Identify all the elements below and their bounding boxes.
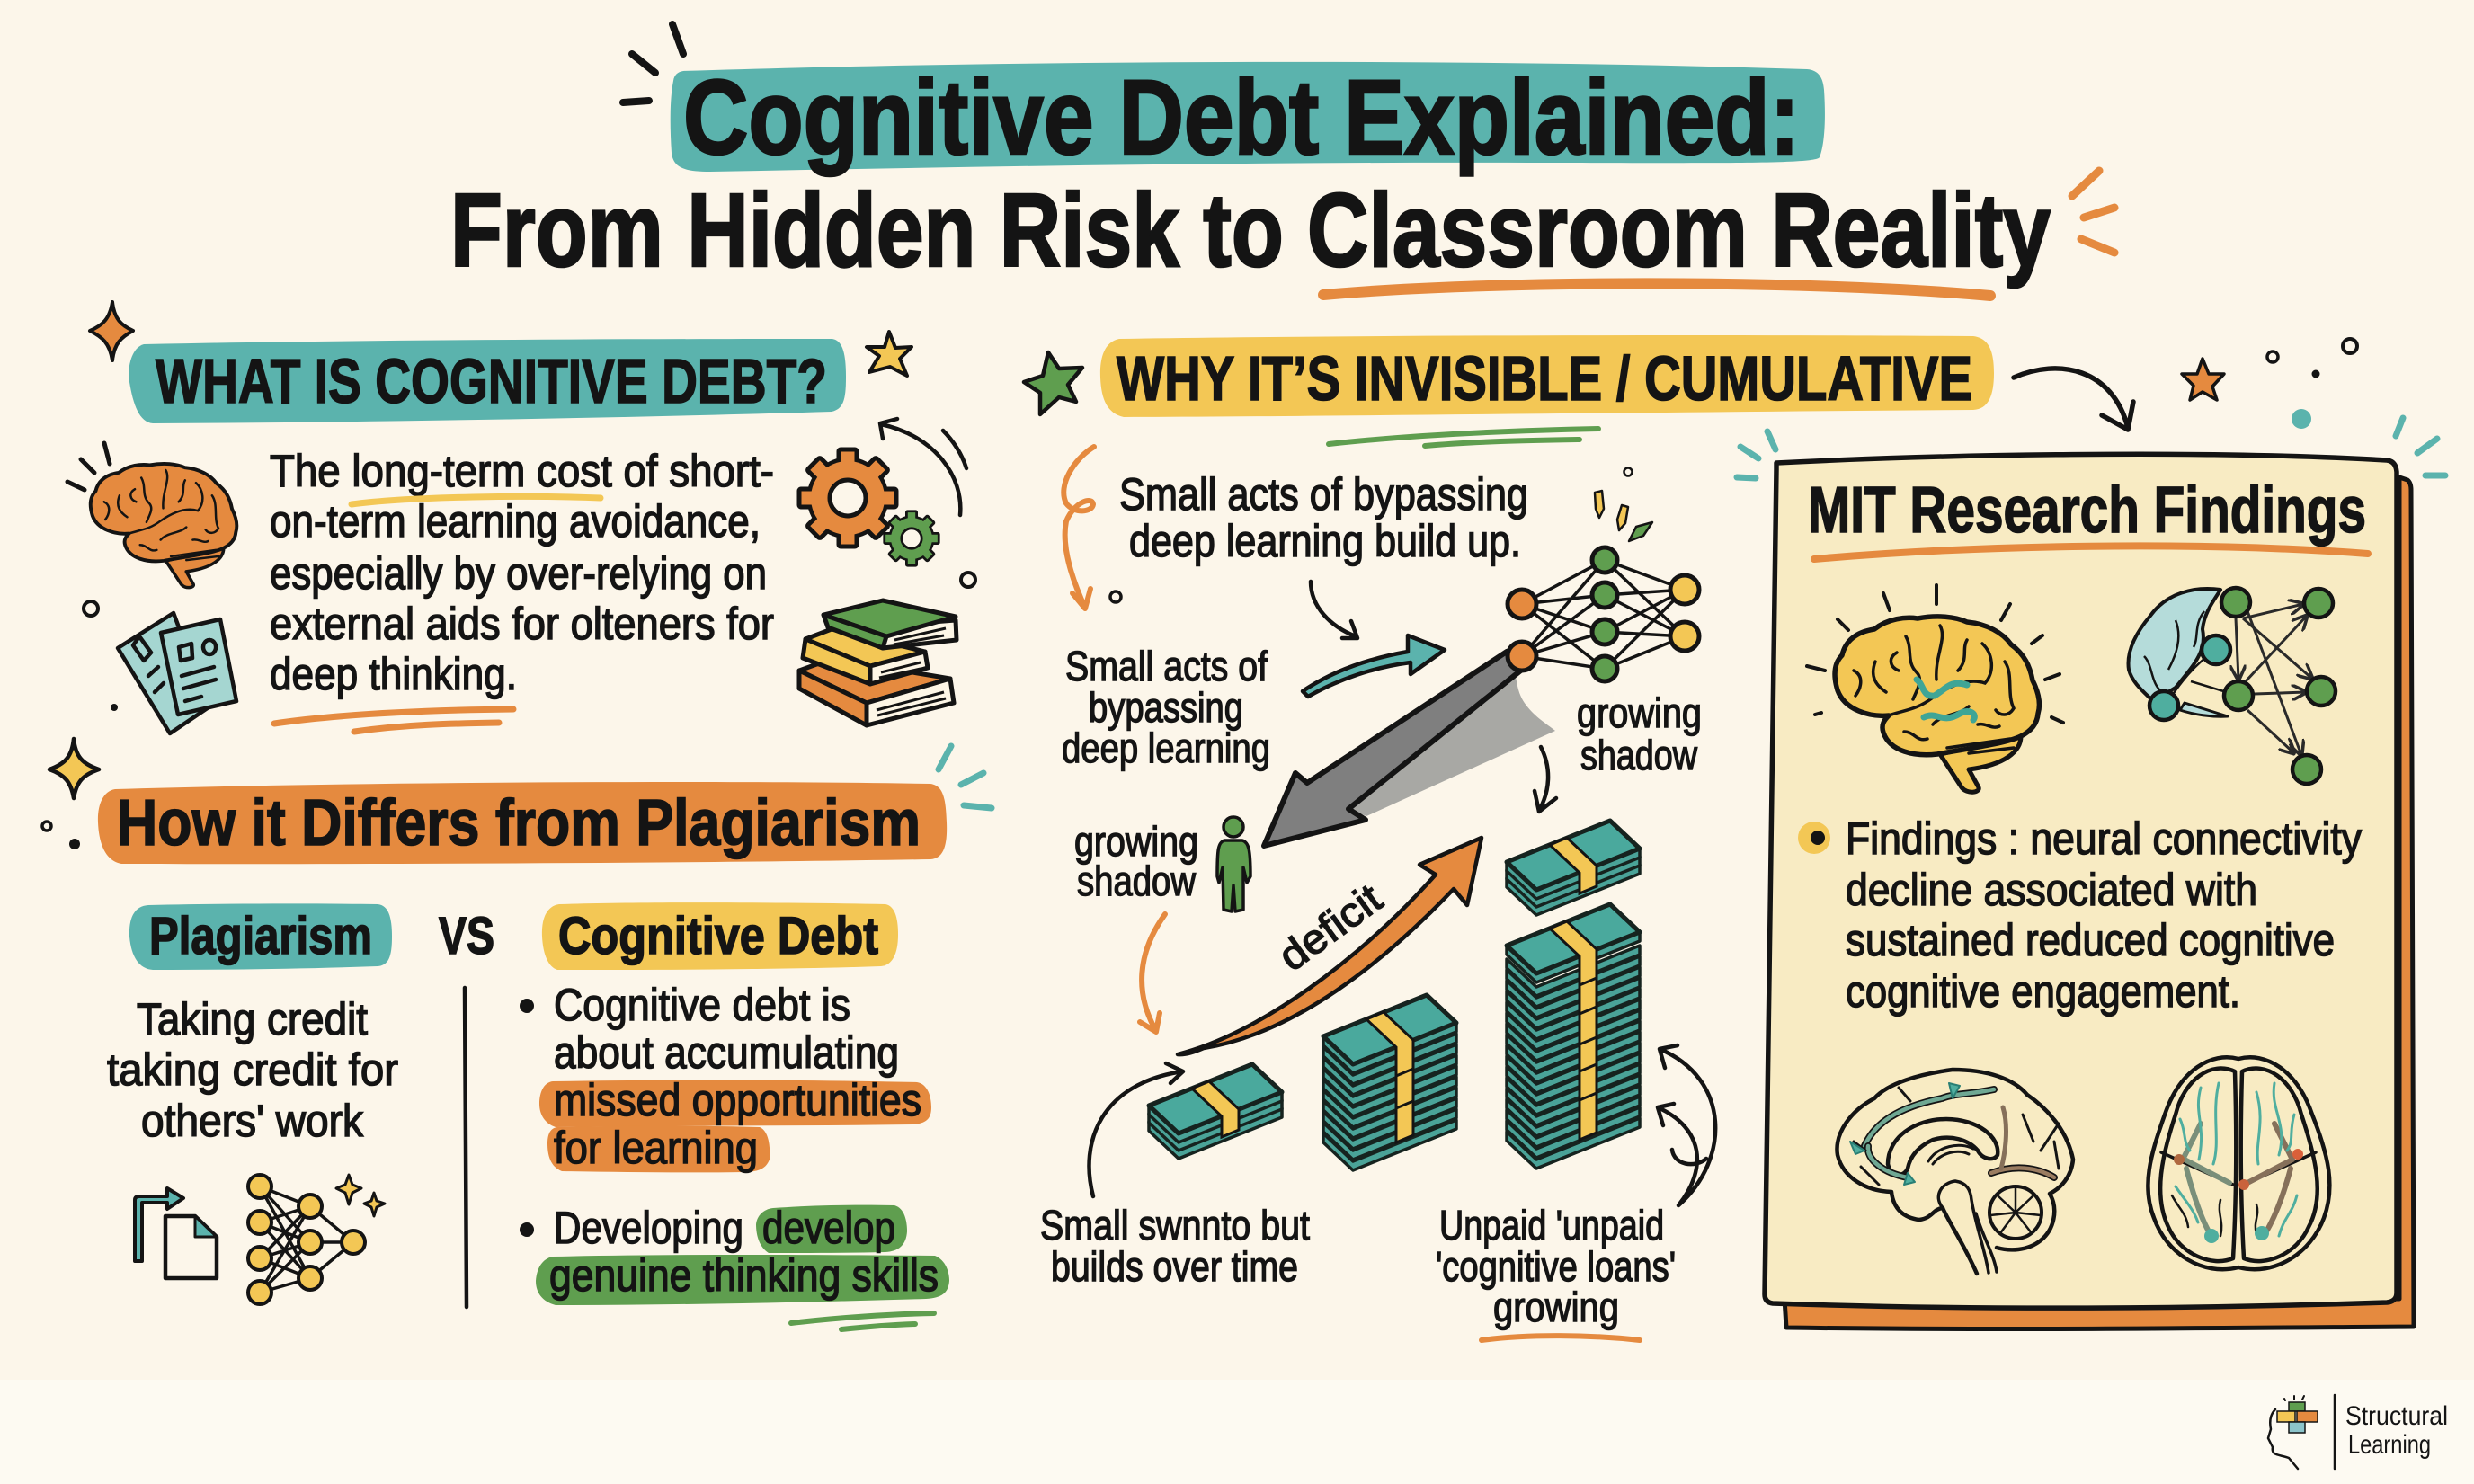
body text: especially by over-relying on (270, 548, 767, 599)
green underlines (1329, 429, 1598, 446)
panel: MIT research findings (1765, 454, 2414, 1329)
decorative circle (1110, 591, 1121, 602)
brain rays (67, 443, 110, 490)
text: small builds: Small swnnto but (1040, 1202, 1310, 1249)
cognitive debt bullets (520, 980, 949, 1305)
text: unpaid loans: Unpaid 'unpaid (1439, 1202, 1664, 1249)
icon: orange sparkle (90, 302, 133, 360)
text: unpaid loans (1436, 1202, 1676, 1330)
text: small builds: builds over time (1051, 1243, 1298, 1290)
cognitive debt bullets: develop (762, 1203, 895, 1253)
logo: structural learning (2268, 1395, 2448, 1469)
icon: orange brain (91, 464, 236, 588)
arrows: unpaid loop (1658, 1045, 1715, 1205)
text: growing shadow right: growing (1577, 689, 1702, 736)
title underline (1323, 283, 1990, 296)
text: growing shadow left (1074, 818, 1198, 904)
icon: neural network (1508, 547, 1699, 681)
plagiarism description: taking credit for (107, 1044, 398, 1095)
footer band (0, 1380, 2474, 1484)
cognitive debt bullets: Developing (554, 1203, 743, 1253)
findings text: decline associated with (1846, 865, 2257, 915)
brain rays (1807, 585, 2063, 723)
yellow underline (352, 496, 601, 504)
heading pill (1100, 335, 1994, 417)
arrow: deficit rising (1178, 838, 1482, 1054)
orange underlines (274, 709, 513, 732)
panel backing (1784, 477, 2414, 1329)
text: growing shadow left: growing (1074, 818, 1198, 865)
logo wordmark (2345, 1401, 2448, 1460)
text: small acts (1119, 469, 1528, 566)
icon: sparkles (336, 1175, 385, 1216)
icon: top-view brain (2148, 1057, 2329, 1269)
cognitive debt pill: Cognitive Debt (558, 907, 878, 965)
body text: external aids for olteners for (270, 599, 774, 649)
icon: yellow brain (1835, 617, 2039, 792)
panel: what is cognitive debt (67, 302, 975, 733)
money stack small (1149, 1064, 1282, 1159)
arrow: black curved (1311, 582, 1357, 638)
arrow: builds (1089, 1063, 1183, 1196)
title line two: From Hidden Risk to Classroom Reality (450, 172, 2051, 289)
body text: The long-term cost of short- (270, 446, 774, 496)
cognitive debt bullets: genuine thinking skills (549, 1250, 939, 1301)
icon: yellow star (867, 332, 912, 376)
findings text (1846, 813, 2362, 1017)
money stack medium (1323, 995, 1456, 1170)
logo wordmark: Structural (2345, 1401, 2448, 1431)
green underlines (791, 1313, 934, 1329)
arrow: orange curly (1063, 447, 1094, 609)
icon: documents (118, 613, 236, 733)
text: growing shadow left: shadow (1077, 858, 1197, 904)
decorative dots (84, 573, 975, 711)
text: small builds (1040, 1202, 1310, 1290)
plagiarism description: others' work (141, 1096, 364, 1146)
title (450, 24, 2114, 296)
icon: person (1217, 817, 1250, 911)
text: small acts: Small acts of bypassing (1119, 469, 1528, 520)
icon: yellow neural network (248, 1175, 365, 1304)
teal ticks (939, 746, 992, 808)
text: small acts of bypassing: Small acts of (1065, 643, 1268, 689)
heading: WHY IT’S INVISIBLE / CUMULATIVE (1117, 343, 1972, 413)
teal ticks (1737, 418, 2445, 478)
vertical divider (465, 988, 467, 1307)
arrow: to MIT panel (2014, 369, 2133, 430)
text: small acts of bypassing: bypassing (1089, 684, 1243, 731)
title highlight (671, 62, 1825, 172)
cognitive debt bullets: Cognitive debt is (554, 980, 850, 1030)
label: deficit: deficit (1269, 875, 1391, 980)
arrow: shadow down (1535, 747, 1556, 812)
logo divider (2334, 1395, 2336, 1469)
icon: green star (1024, 352, 1082, 414)
icon: copied document (135, 1188, 217, 1278)
money stack tall base (1507, 904, 1640, 1169)
heading pill (129, 339, 846, 423)
arrow: teal (1303, 635, 1445, 697)
shadow (1348, 676, 1555, 816)
heading pill (98, 782, 947, 864)
plagiarism pill: Plagiarism (149, 907, 372, 965)
body text: deep thinking. (270, 649, 517, 699)
body text (270, 446, 774, 699)
heading: WHAT IS COGNITIVE DEBT? (156, 346, 827, 416)
icon: sagittal brain (1837, 1070, 2073, 1274)
cognitive debt bullets: for learning (554, 1123, 758, 1173)
decorative star (2182, 359, 2224, 400)
icon: connected blue brain (2128, 588, 2336, 784)
heading underline (1814, 546, 2368, 559)
title line one: Cognitive Debt Explained: (683, 58, 1800, 177)
icon: pencils (1595, 467, 1652, 541)
cognitive debt bullets: missed opportunities (554, 1075, 921, 1125)
text: growing shadow right: shadow (1580, 732, 1698, 778)
text: unpaid loans: 'cognitive loans' (1436, 1243, 1676, 1290)
bullet (1798, 822, 1830, 854)
text: small acts of bypassing (1062, 643, 1270, 771)
arrow: gears cycle (880, 419, 966, 515)
findings text: sustained reduced cognitive (1846, 915, 2335, 965)
arrow: orange down (1140, 914, 1165, 1032)
text: small acts of bypassing: deep learning (1062, 724, 1270, 771)
text: unpaid loans: growing (1493, 1284, 1619, 1330)
findings text: cognitive engagement. (1846, 966, 2240, 1017)
title ticks black (623, 24, 683, 102)
body text: on-term learning avoidance, (270, 496, 761, 547)
orange underline (1482, 1336, 1640, 1340)
icon: yellow sparkle (49, 739, 99, 798)
panel card (1765, 454, 2397, 1308)
logo icon (2268, 1396, 2318, 1469)
panel: why it's invisible (1024, 335, 1994, 1340)
plagiarism description (107, 994, 398, 1146)
text: growing shadow right (1577, 689, 1702, 778)
text: small acts: deep learning build up. (1129, 516, 1521, 566)
highlights (539, 1080, 931, 1127)
icon: gears (799, 449, 939, 565)
money stack tall top (1507, 821, 1640, 915)
cognitive debt bullets: about accumulating (554, 1027, 899, 1078)
decorative dots (42, 822, 80, 849)
decorative dots (2267, 339, 2357, 429)
findings text: Findings : neural connectivity (1846, 813, 2362, 864)
plagiarism description: Taking credit (137, 994, 368, 1044)
icon: books (799, 600, 957, 725)
VS label: VS (439, 907, 494, 965)
arrow: grey shadow (1264, 652, 1523, 846)
logo wordmark: Learning (2348, 1430, 2431, 1460)
panel: how it differs from plagiarism (42, 739, 992, 1329)
title ticks orange (2072, 171, 2114, 253)
heading: How it Differs from Plagiarism (117, 787, 921, 859)
